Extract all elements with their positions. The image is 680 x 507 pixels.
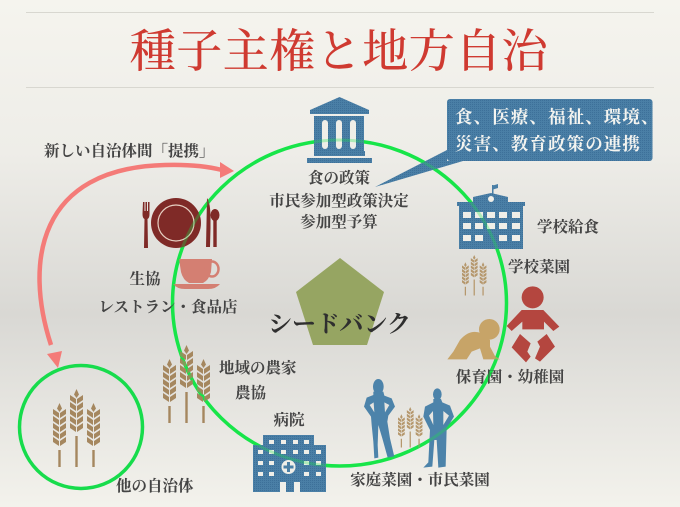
arrow: partnership between municipalities — [40, 162, 234, 368]
green circle: main municipality — [172, 140, 506, 466]
icon: wheat (other municipality) — [53, 389, 100, 467]
text: food policy — [269, 168, 409, 231]
icon: hospital — [253, 435, 326, 492]
label: co-op: 生協 — [129, 269, 161, 288]
icon: wheat (school garden) — [462, 255, 486, 296]
title rules — [26, 12, 654, 88]
label: local farmers: 地域の農家 — [219, 358, 297, 377]
icon: school — [457, 184, 525, 249]
icon: man silhouette — [423, 388, 454, 468]
callout: policy coordination: 災害、教育政策の連携 — [455, 134, 641, 154]
icon: wheat (local farmers) — [163, 345, 210, 423]
callout: policy coordination — [375, 99, 660, 187]
icon: woman silhouette — [364, 379, 395, 458]
label: home and citizen gardens: 家庭菜園・市民菜園 — [350, 470, 490, 489]
label: school garden: 学校菜園 — [508, 257, 570, 276]
title: 種子主権と地方自治 — [130, 26, 550, 77]
callout: policy coordination: 食、医療、福祉、環境、 — [455, 107, 660, 127]
icon: plate and cutlery — [142, 198, 220, 248]
label: nursery and kindergarten: 保育園・幼稚園 — [456, 367, 564, 386]
label: hospital: 病院 — [273, 410, 305, 429]
label: new partnership: 新しい自治体間「提携」 — [44, 141, 215, 160]
label: other municipality: 他の自治体 — [116, 477, 194, 495]
label: agricultural co-op: 農協 — [235, 383, 267, 402]
text: food policy: 市民参加型政策決定 — [269, 191, 409, 210]
label: restaurants: レストラン・食品店 — [98, 298, 238, 316]
label: school lunch: 学校給食 — [537, 217, 599, 236]
text: food policy: 参加型予算 — [300, 212, 378, 231]
icon: wheat (home garden) — [398, 407, 422, 448]
icon: coffee cup — [173, 259, 220, 289]
pentagon — [296, 258, 384, 345]
icon: government building — [307, 97, 372, 163]
green circle: other municipality — [20, 366, 142, 488]
icon: crawling baby — [447, 319, 500, 359]
text: food policy: 食の政策 — [308, 168, 370, 187]
icon: baby (red) — [507, 286, 559, 362]
label: seed bank: シードバンク — [268, 312, 411, 338]
